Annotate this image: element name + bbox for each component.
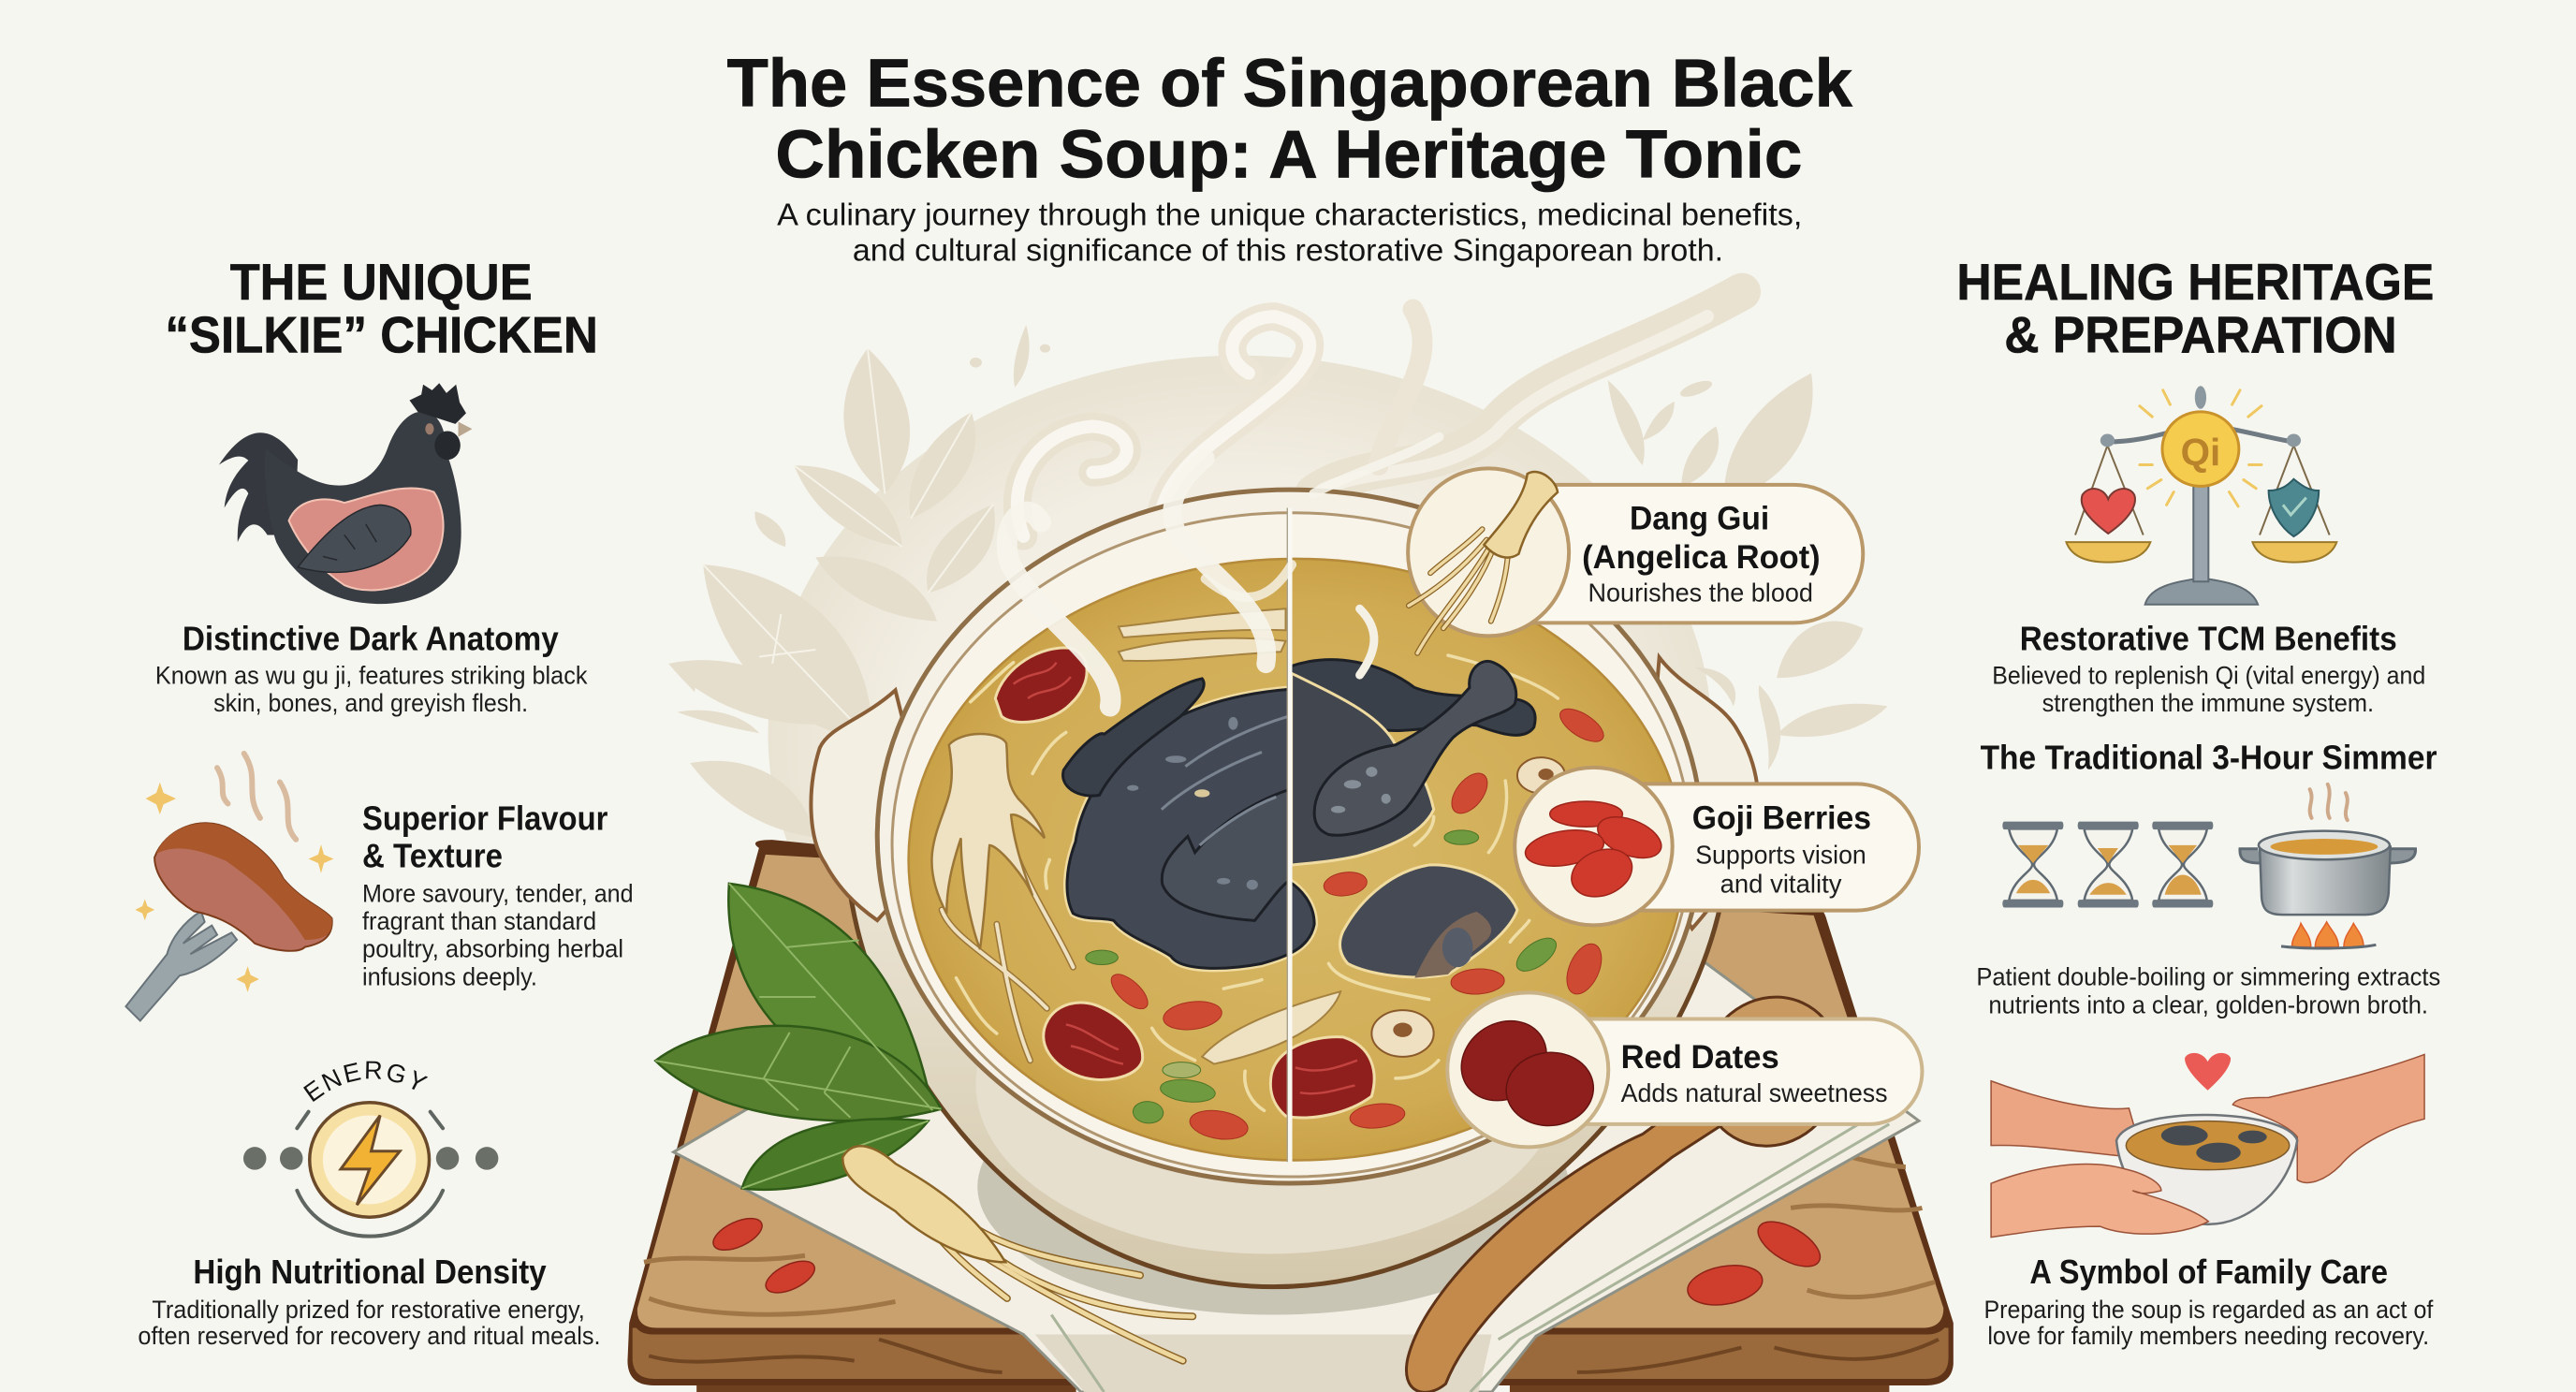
steam behind bowl: [1017, 292, 1742, 550]
date 1: [995, 648, 1087, 723]
heading: right: HEALING HERITAGE: [1956, 254, 2434, 311]
text: distinctive dark anatomy: Distinctive Dark Anatomy: [183, 619, 559, 657]
table: [627, 840, 1954, 1392]
callout: Dang Gui: Nourishes the blood: [1588, 579, 1813, 608]
icon: goji berries: [1521, 801, 1670, 906]
icon: energy: ENERGY: [303, 1062, 429, 1102]
text: distinctive dark anatomy: [155, 619, 588, 717]
basil leaves and root: [655, 884, 1193, 1361]
text: superior flavour: infusions deeply.: [362, 961, 537, 990]
text: patient double-boiling: [1976, 961, 2440, 1019]
broth swirls: [956, 655, 1558, 1110]
text: patient double-boiling: Patient double-boiling or simmering extracts: [1976, 961, 2440, 990]
text: distinctive dark anatomy: skin, bones, and greyish flesh.: [213, 688, 528, 717]
icon: meat on a fork: [125, 754, 333, 1020]
date 3: [1270, 1037, 1374, 1118]
text: superior flavour: [362, 799, 634, 990]
callout: Goji Berries: Goji Berries: [1692, 800, 1871, 837]
callout: Goji Berries: [1515, 768, 1919, 925]
callout: Dang Gui: (Angelica Root): [1582, 539, 1821, 576]
text: symbol of family care: love for family members needing recovery.: [1987, 1321, 2429, 1350]
text: restorative tcm benefits: Believed to replenish Qi (vital energy) and: [1992, 660, 2425, 689]
heading: right: & PREPARATION: [2004, 307, 2397, 364]
text: restorative tcm benefits: [1992, 619, 2425, 717]
icon: qi balance scale: Qi: [2181, 431, 2220, 474]
icon: black hen: [219, 383, 472, 604]
callout: Goji Berries: and vitality: [1720, 869, 1841, 898]
chicken: [1063, 660, 1535, 978]
callout: Goji Berries: Supports vision: [1695, 841, 1866, 870]
text: symbol of family care: [1983, 1253, 2434, 1350]
text: superior flavour: & Texture: [362, 836, 503, 874]
text: patient double-boiling: nutrients into a clear, golden-brown broth.: [1988, 990, 2428, 1019]
text: superior flavour: More savoury, tender, and: [362, 878, 634, 907]
bowl: [811, 490, 1758, 1314]
text: high nutritional density: often reserved for recovery and ritual meals.: [138, 1321, 600, 1350]
text: restorative tcm benefits: strengthen the immune system.: [2042, 688, 2374, 717]
callout: Dang Gui: [1408, 468, 1863, 653]
spoon: [1406, 974, 1866, 1392]
title: [727, 46, 1853, 193]
decorative backdrop: disc, leaves: [668, 325, 1887, 1114]
panel: healing heritage and preparation: [1956, 254, 2440, 1350]
text: high nutritional density: Traditionally prized for restorative energy,: [152, 1295, 585, 1324]
callout: Red Dates: Red Dates: [1621, 1039, 1779, 1076]
date 2: [1044, 1003, 1143, 1079]
root in broth: [931, 734, 1073, 1061]
subtitle: and cultural significance of this restorative Singaporean broth.: [853, 233, 1723, 268]
subtitle: [777, 198, 1802, 268]
heading: left: THE UNIQUE: [230, 254, 533, 311]
callout: Red Dates: Adds natural sweetness: [1621, 1078, 1888, 1107]
central illustration: [627, 292, 1954, 1392]
heading: right: [1956, 254, 2434, 364]
icon: energy: [243, 1062, 498, 1238]
panel: the unique silkie chicken: [124, 254, 634, 1350]
text: restorative tcm benefits: Restorative TCM Benefits: [2020, 619, 2397, 657]
callout: Red Dates: [1446, 992, 1922, 1147]
napkin: [674, 961, 1919, 1392]
steam over bowl: [1007, 437, 1439, 707]
text: superior flavour: Superior Flavour: [362, 799, 607, 838]
heading: traditional 3-hour simmer: The Traditional 3-Hour Simmer: [1981, 739, 2437, 777]
scattered goji berries: [709, 1212, 1827, 1311]
soup contents: [931, 608, 1611, 1144]
text: symbol of family care: A Symbol of Family Care: [2029, 1253, 2388, 1291]
heading: left: [165, 254, 598, 364]
icon: qi balance scale: [2066, 386, 2336, 605]
callout: Dang Gui: Dang Gui: [1630, 500, 1769, 536]
handles: [811, 657, 1758, 929]
text: superior flavour: fragrant than standard: [362, 906, 596, 935]
goji pieces: [1105, 703, 1611, 1144]
text: symbol of family care: Preparing the soup is regarded as an act of: [1983, 1295, 2434, 1324]
steam over soup: [1360, 608, 1374, 675]
green herbs: [1086, 830, 1563, 1127]
icon: simmering pot: [2240, 784, 2416, 948]
root on napkin: [842, 1146, 1193, 1361]
icon: three hourglasses: [2002, 822, 2213, 908]
icon: hands sharing a bowl: [1991, 1053, 2424, 1238]
text: distinctive dark anatomy: Known as wu gu ji, features striking black: [155, 660, 588, 689]
dividing line: [1287, 507, 1293, 1162]
shredded roots: [1119, 608, 1340, 1064]
title: Chicken Soup: A Heritage Tonic: [775, 118, 1802, 193]
subtitle: A culinary journey through the unique characteristics, medicinal benefits,: [777, 198, 1802, 233]
longan: [1371, 757, 1565, 1057]
text: high nutritional density: High Nutritional Density: [193, 1253, 547, 1291]
icon: dang gui root: [1409, 472, 1558, 653]
text: high nutritional density: [138, 1253, 600, 1350]
icon: red dates: [1446, 1009, 1608, 1137]
heading: left: “SILKIE” CHICKEN: [165, 307, 598, 364]
title: The Essence of Singaporean Black: [727, 46, 1853, 121]
text: superior flavour: poultry, absorbing herbal: [362, 934, 623, 963]
